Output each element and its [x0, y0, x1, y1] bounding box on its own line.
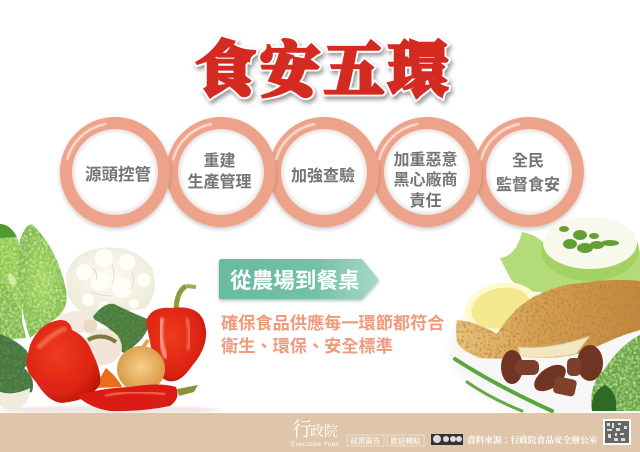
ground shadow	[0, 406, 220, 414]
ring 4: 加重惡意黑心廠商責任: 黑心廠商	[393, 170, 458, 189]
icon: right red pepper	[146, 286, 206, 381]
logo: 行政院: 政院	[310, 421, 338, 441]
button: 政策廣告: 政策廣告	[350, 436, 381, 446]
icon: QR code	[603, 419, 631, 445]
illustration: plated fish	[448, 217, 640, 414]
logo: 行政院: Executive Yuan	[291, 442, 339, 448]
button: 歡迎轉貼: 歡迎轉貼	[390, 436, 421, 446]
ring 2: 重建生產管理: 重建	[203, 152, 236, 170]
heading tag: 從農場到餐桌: 從農場到餐桌	[230, 268, 360, 293]
footer bar	[0, 413, 640, 452]
icon: broccoli	[591, 335, 640, 411]
icon: cauliflower	[66, 247, 155, 316]
title: 食安五環	[196, 23, 452, 109]
ring 2: 重建生產管理: 生產管理	[187, 172, 252, 191]
icon: red chili	[77, 384, 198, 411]
ring 1: 源頭控管: 源頭控管	[85, 164, 151, 184]
icon: green beans	[455, 359, 552, 411]
logo: 行政院	[291, 413, 339, 448]
logo: 行政院: 行	[292, 413, 312, 442]
ring 3: 加強查驗: 加強查驗	[291, 166, 355, 185]
body text	[221, 313, 444, 356]
ring 3: 加強查驗	[269, 117, 379, 227]
source text: 資料來源：行政院食品安全辦公室	[467, 434, 598, 446]
icon: mushrooms	[501, 345, 603, 397]
ring 4: 加重惡意黑心廠商責任	[372, 117, 482, 227]
illustration: vegetables	[0, 224, 220, 414]
icon: lettuce	[500, 232, 640, 294]
button: 歡迎轉貼	[387, 435, 424, 446]
icon: lemon slice	[460, 276, 542, 340]
icon: carrot	[94, 368, 122, 388]
icon: kale behind	[92, 304, 150, 353]
icon: onion	[117, 340, 165, 392]
heading tag: 從農場到餐桌	[219, 259, 379, 299]
icon: cabbage	[0, 224, 67, 340]
ring 1: 源頭控管	[60, 117, 170, 227]
ring 5: 全民監督食安: 全民	[512, 152, 544, 170]
icon: left kale	[0, 334, 33, 394]
icon: fish fillet	[456, 280, 640, 359]
icon: creative commons	[431, 434, 463, 445]
body text: 衛生、環保、安全標準	[221, 336, 393, 356]
title: 食安五環	[196, 23, 452, 109]
button: 政策廣告	[347, 435, 384, 446]
icon: sauce bowl	[541, 217, 639, 281]
icon: garlic	[0, 388, 30, 410]
body text: 確保食品供應每一環節都符合	[221, 313, 444, 333]
icon: mushrooms	[57, 311, 122, 365]
plate	[448, 282, 640, 414]
icon: left red pepper	[26, 320, 100, 403]
ring 5: 全民監督食安: 監督食安	[496, 175, 560, 194]
ring 2: 重建生產管理	[166, 117, 276, 227]
ring 4: 加重惡意黑心廠商責任: 責任	[409, 192, 442, 210]
ring 5: 全民監督食安	[474, 117, 584, 227]
panel: five rings	[60, 117, 584, 227]
ring 4: 加重惡意黑心廠商責任: 加重惡意	[393, 150, 458, 169]
